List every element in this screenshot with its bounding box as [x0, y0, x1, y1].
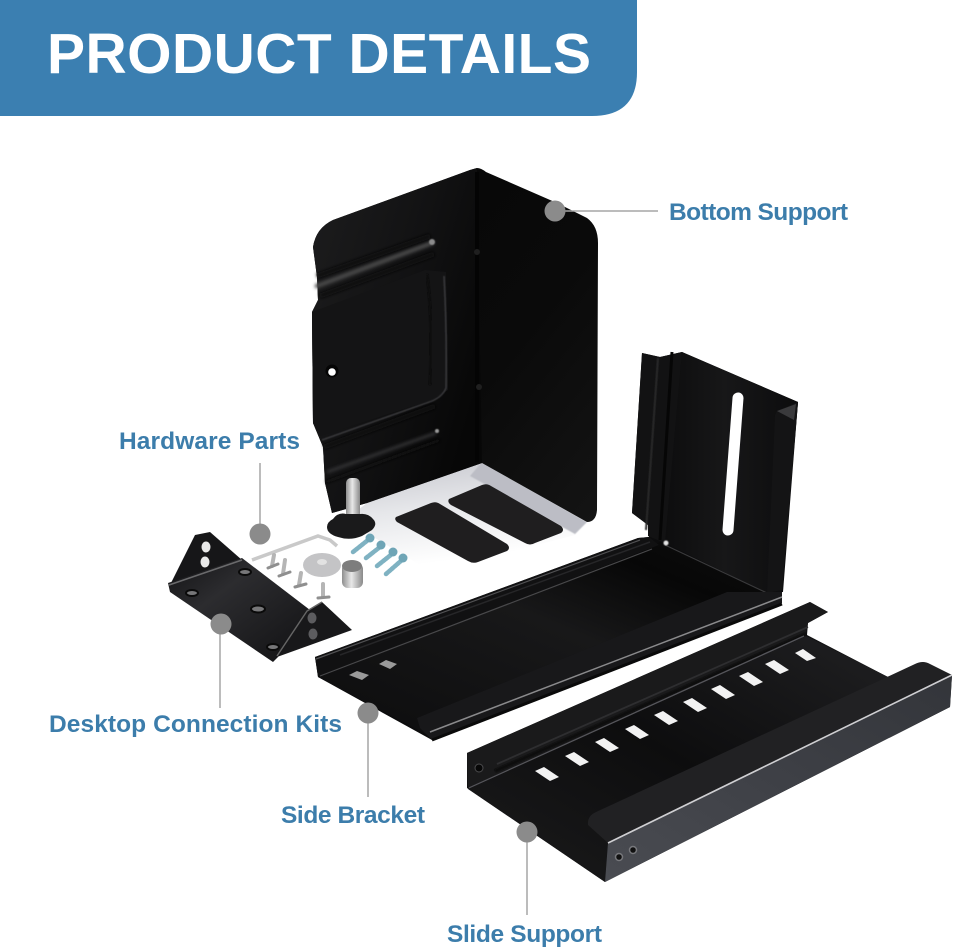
callout: hardware parts: [119, 428, 300, 544]
rail: [467, 602, 828, 788]
callout: desktop connection kits: [49, 614, 342, 738]
small pins: [272, 555, 323, 596]
bottom lip: [417, 592, 782, 740]
header banner: [0, 0, 637, 116]
spacer: [342, 563, 363, 588]
callout: bottom support: [544, 199, 848, 226]
vertical slot: [728, 398, 738, 530]
rail holes: [349, 660, 397, 680]
callout: hardware parts: Hardware Parts: [119, 428, 300, 455]
slots: [535, 649, 816, 781]
hole: [326, 364, 338, 378]
right flange: [767, 402, 798, 593]
washer: [303, 553, 341, 577]
part: slide support: [467, 602, 952, 882]
hex wrench: [252, 536, 337, 560]
end holes: [616, 846, 636, 860]
callout: desktop connection kits: Desktop Connection Kits: [49, 711, 342, 738]
callout: slide support: Slide Support: [447, 921, 602, 948]
rubber pads: [395, 484, 563, 563]
lip top: [588, 662, 952, 843]
title: PRODUCT DETAILS: [47, 22, 591, 86]
top rail: [315, 537, 659, 677]
callout: side bracket: Side Bracket: [281, 802, 425, 829]
base floor: [318, 542, 767, 736]
callout: bottom support: Bottom Support: [669, 199, 848, 226]
callout: side bracket: [281, 702, 425, 829]
part: side bracket: [315, 352, 798, 740]
left flange: [632, 352, 682, 543]
part: hardware parts: [252, 478, 408, 598]
floor: [468, 636, 888, 882]
back plate: [665, 352, 798, 593]
side face: [605, 675, 952, 882]
callout: slide support: [447, 822, 602, 948]
bolt: [346, 478, 360, 520]
part: bottom support: [312, 168, 598, 565]
screws: [353, 540, 402, 574]
part: desktop connection kit: [168, 532, 352, 662]
